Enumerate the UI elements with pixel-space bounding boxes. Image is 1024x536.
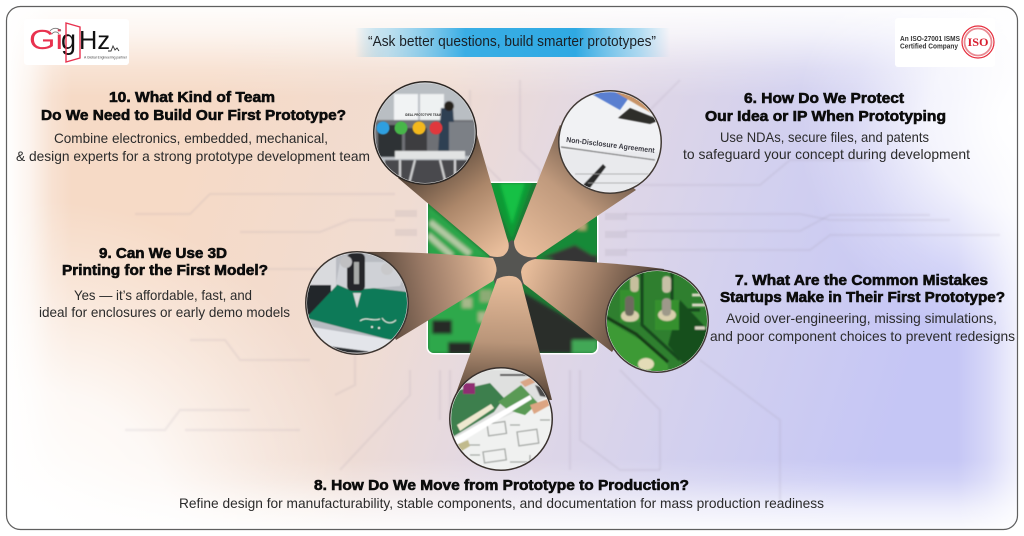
text block: question 7: Avoid over-engineering, missing simulations, [726,310,997,326]
text block: question 9: Yes — it’s affordable, fast, and [74,287,252,303]
text block: question 10: 10. What Kind of Team [109,90,275,106]
logo: ISO certification: An ISO-27001 ISMS [900,36,960,43]
photo circle: 3D printing [305,251,409,355]
center image: circuit board [426,182,598,354]
star hub [489,240,537,285]
photo circle: NDA document: Non-Disclosure Agreement [566,135,656,155]
text block: question 10: Combine electronics, embedded, mechanical, [54,130,328,146]
logo: ISO certification: Certified Company [900,44,958,50]
spoke: 3d printing [352,252,497,340]
text block: question 7: and poor component choices to prevent redesigns [710,328,1015,344]
text block: question 9: 9. Can We Use 3D [99,246,227,262]
logo: ISO certification: ISO [968,35,988,49]
banner: tagline [355,28,670,57]
text block: question 7 [710,273,1015,344]
spoke: ip protection [514,125,636,257]
logo: GigHz: A Global Engineering partner [84,56,128,60]
text block: question 10: & design experts for a strong prototype development team [16,148,370,164]
banner: tagline: “Ask better questions, build smarter prototypes” [368,33,656,50]
text block: question 7: Startups Make in Their First Prototype? [720,290,1005,306]
text block: question 9: Printing for the First Model? [62,263,268,279]
spoke: team [398,128,509,257]
text block: question 9: ideal for enclosures or early demo models [39,304,290,320]
text block: question 6: Our Idea or IP When Prototyping [705,109,946,125]
text block: question 6: Use NDAs, secure files, and patents [720,129,929,145]
text block: question 10: Do We Need to Build Our First Prototype? [41,108,346,124]
logo: GigHz: Hz [79,25,110,55]
photo circle: team meeting [373,81,477,185]
text block: question 10 [16,90,370,164]
text block: question 6 [683,91,970,162]
text block: question 9 [39,246,290,320]
logo: GigHz: Gi [29,24,63,55]
photo circle: circuit schematic [449,367,553,471]
spoke: production [455,276,552,400]
text block: question 7: 7. What Are the Common Mistakes [735,273,988,289]
text block: question 6: to safeguard your concept during development [683,146,970,162]
logo: GigHz: g [61,24,76,55]
photo circle: solder pins [605,269,709,373]
text block: question 8 [179,478,824,511]
text block: question 6: 6. How Do We Protect [744,91,904,107]
photo circle: NDA document [558,90,662,194]
logo: GigHz [24,19,129,65]
text block: question 8: 8. How Do We Move from Prototype to Production? [314,478,689,494]
spoke: mistakes [521,259,664,352]
logo: ISO certification [895,18,995,67]
text block: question 8: Refine design for manufacturability, stable components, and documentation for mass production readiness [179,495,824,511]
photo circle: team meeting: IDEAL PROTOTYPE TEAM [405,112,441,117]
